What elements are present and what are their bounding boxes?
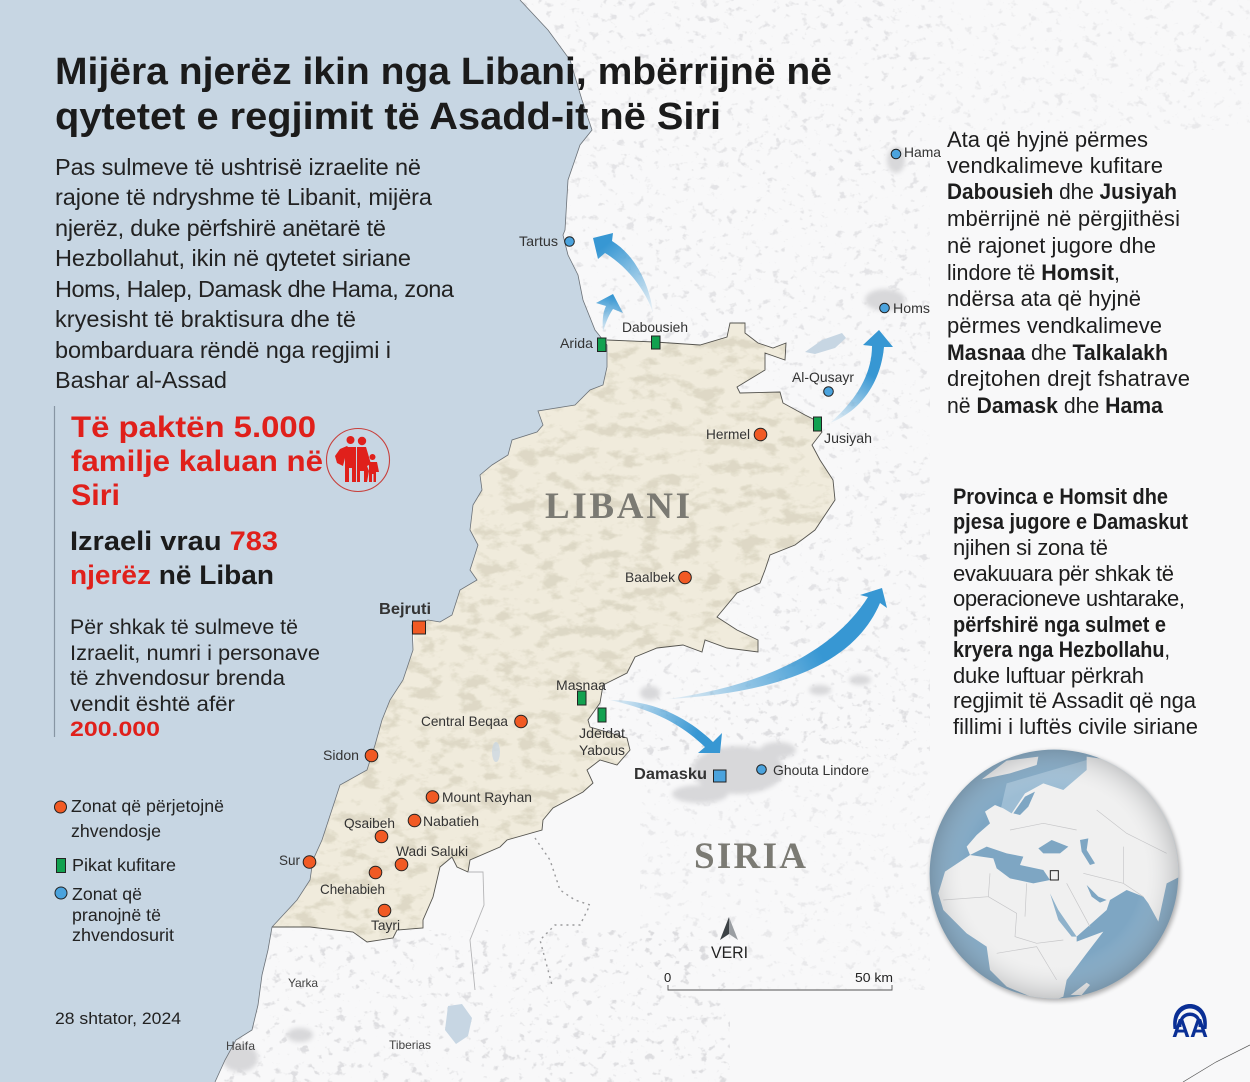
title	[55, 51, 832, 138]
text block: crossings: përmes vendkalimeve	[947, 313, 1162, 338]
callout: killed: njerëz në Liban	[70, 560, 274, 590]
arrow: Masnaa to Damascus	[610, 700, 722, 753]
callout: killed	[70, 526, 278, 590]
text block: crossings: mbërrijnë në përgjithësi	[947, 206, 1180, 231]
Black sea	[1038, 840, 1068, 853]
Displacement zones: Qsaibeh	[344, 815, 395, 831]
main land masses	[938, 757, 1187, 1003]
callout: families: Të paktën 5.000	[71, 411, 316, 444]
Persian gulf	[1087, 885, 1107, 903]
intro paragraph	[55, 154, 455, 393]
Displacement zones: Mount Rayhan	[442, 789, 532, 805]
side rule	[54, 406, 56, 737]
legend: receiving zones: zhvendosurit	[72, 925, 174, 945]
title: qytetet e regjimit të Asadd-it në Siri	[55, 96, 721, 138]
text block: evacuation zones: kryera nga Hezbollahu,	[953, 637, 1170, 662]
Damascus area	[634, 762, 869, 783]
legend: receiving zones	[55, 884, 174, 945]
text block: evacuation zones: operacioneve ushtarake,	[953, 586, 1185, 611]
text block: crossings: drejtohen drejt fshatrave	[947, 366, 1190, 391]
north arrow: VERI	[711, 943, 748, 962]
text block: crossings	[947, 127, 1190, 418]
callout: families	[71, 411, 323, 512]
Mediterranean sea	[970, 847, 1050, 883]
callout: displaced: 200.000	[70, 717, 160, 741]
logo: Anadolu Agency: AA	[1172, 1013, 1208, 1043]
intro paragraph: kryesisht të braktisura dhe të	[55, 306, 356, 332]
arrow: Jusiyah to Homs	[830, 330, 893, 423]
Border crossings: Jusiyah	[824, 430, 872, 446]
country label: Lebanon: LIBANI	[545, 486, 690, 527]
Border crossings	[556, 319, 872, 758]
intro paragraph: Bashar al-Assad	[55, 367, 227, 393]
legend: displacement zones: zhvendosje	[71, 821, 161, 841]
globe shadow	[930, 751, 1180, 1001]
text block: crossings: lindore të Homsit,	[947, 260, 1120, 285]
intro paragraph: bombarduara rëndë nga regjimi i	[55, 337, 391, 363]
text block: evacuation zones: fillimi i luftës civile siriane	[953, 714, 1198, 739]
intro paragraph: Hezbollahut, ikin në qytetet siriane	[55, 245, 411, 271]
Border crossings: Dabousieh	[622, 319, 688, 335]
intro paragraph: rajone të ndryshme të Libanit, mijëra	[55, 184, 433, 210]
legend: border crossings: Pikat kufitare	[72, 855, 176, 875]
intro paragraph: Pas sulmeve të ushtrisë izraelite në	[55, 154, 421, 180]
Receiving cities	[519, 144, 941, 396]
Displacement zones: Sidon	[323, 747, 359, 763]
Caspian sea	[1080, 838, 1095, 865]
Damascus area: Ghouta Lindore	[773, 762, 869, 778]
Displacement zones: Chehabieh	[320, 881, 385, 897]
Damascus area: Damasku	[634, 766, 707, 783]
disputed border dashes	[535, 838, 590, 985]
Context towns: Tiberias	[389, 1038, 431, 1052]
country label: Syria: SIRIA	[694, 836, 806, 877]
arrow: Arida north	[596, 294, 623, 332]
Displacement zones: Sur	[279, 852, 300, 868]
legend: displacement zones	[54, 796, 224, 841]
Displacement zones: Baalbek	[625, 569, 676, 585]
text block: evacuation zones: duke luftuar përkrah	[953, 663, 1144, 688]
legend: receiving zones: pranojnë të	[72, 905, 161, 925]
callout: killed: Izraeli vrau 783	[70, 526, 278, 556]
text block: crossings: Ata që hyjnë përmes	[947, 127, 1148, 152]
text block: evacuation zones: pjesa jugore e Damaskut	[953, 509, 1189, 534]
Displacement zones: Tayri	[371, 917, 400, 933]
Border crossings: Jdeidat	[579, 725, 625, 741]
gloss	[930, 750, 1178, 998]
lakes	[445, 333, 846, 1044]
scale bar: 0	[664, 970, 671, 985]
Context towns: Yarka	[288, 976, 318, 990]
coastline	[215, 0, 607, 1082]
text block: crossings: Dabousieh dhe Jusiyah	[947, 179, 1177, 204]
text block: evacuation zones: përfshirë nga sulmet e	[953, 612, 1166, 637]
text block: evacuation zones: njihen si zona të	[953, 535, 1108, 560]
callout: displaced: Për shkak të sulmeve të	[70, 615, 298, 639]
borders	[943, 810, 1167, 980]
arrow: Masnaa to north east	[668, 588, 887, 699]
Baltic sea and North sea	[1013, 792, 1035, 815]
callout: displaced: Izraelit, numri i personave	[70, 641, 320, 665]
Displacement zones: Nabatieh	[423, 813, 479, 829]
Border crossings: Arida	[560, 335, 593, 351]
Border crossings: Yabous	[579, 742, 625, 758]
Displacement zones: Hermel	[706, 426, 750, 442]
arrow: Arida to Tartus	[593, 233, 653, 313]
legend: displacement zones: Zonat që përjetojnë	[71, 796, 224, 816]
text block: crossings: ndërsa ata që hyjnë	[947, 286, 1141, 311]
Displacement zones: Central Beqaa	[421, 713, 508, 729]
Context towns: Haifa	[226, 1039, 255, 1053]
callout: families: familje kaluan në	[71, 445, 323, 478]
map markers and place labels	[226, 144, 941, 1053]
bottom right line	[1183, 1045, 1250, 1082]
callout: displaced: të zhvendosur brenda	[70, 666, 285, 690]
callout: families: Siri	[71, 479, 120, 512]
text block: crossings: Masnaa dhe Talkalakh	[947, 340, 1168, 365]
icon: family	[326, 428, 390, 492]
text block: evacuation zones	[953, 484, 1198, 739]
Beirut	[379, 601, 431, 634]
Displacement zones	[279, 426, 767, 933]
Receiving cities: Homs	[893, 300, 930, 316]
legend: receiving zones: Zonat që	[72, 884, 142, 904]
text block: evacuation zones: evakuuara për shkak të	[953, 561, 1174, 586]
north arrow	[711, 917, 748, 962]
Red sea	[1050, 893, 1077, 937]
Context towns	[226, 976, 431, 1053]
arctic land	[982, 757, 1038, 779]
text block: crossings: vendkalimeve kufitare	[947, 153, 1163, 178]
scale bar: 50 km	[855, 970, 893, 985]
Displacement zones: Wadi Saluki	[396, 843, 468, 859]
madagascar	[1071, 983, 1090, 995]
Beirut: Bejruti	[379, 601, 431, 618]
Receiving cities: Tartus	[519, 233, 558, 249]
text block: evacuation zones: Provinca e Homsit dhe	[953, 484, 1168, 509]
scale bar	[664, 970, 893, 990]
country area: Lebanon	[260, 315, 850, 955]
title: Mijëra njerëz ikin nga Libani, mbërrijnë në	[55, 51, 832, 93]
intro paragraph: njerëz, duke përfshirë anëtarë të	[55, 215, 386, 241]
text block: crossings: në rajonet jugore dhe	[947, 233, 1156, 258]
ocean	[930, 750, 1178, 998]
Receiving cities: Hama	[904, 144, 941, 160]
date: 28 shtator, 2024	[55, 1010, 181, 1028]
text block: crossings: në Damask dhe Hama	[947, 393, 1164, 418]
Border crossings: Masnaa	[556, 677, 606, 693]
Receiving cities: Al-Qusayr	[792, 369, 854, 385]
callout: displaced: vendit është afër	[70, 692, 235, 716]
southern border	[468, 872, 484, 990]
text block: evacuation zones: regjimit të Assadit që nga	[953, 688, 1197, 713]
globe	[930, 750, 1187, 1003]
callout: displaced	[70, 615, 320, 741]
intro paragraph: Homs, Halep, Damask dhe Hama, zona	[55, 276, 455, 302]
location box	[1050, 871, 1058, 880]
legend	[54, 796, 224, 945]
atlantic and arctic light tint	[1001, 760, 1087, 814]
Lebanon border	[272, 323, 835, 942]
